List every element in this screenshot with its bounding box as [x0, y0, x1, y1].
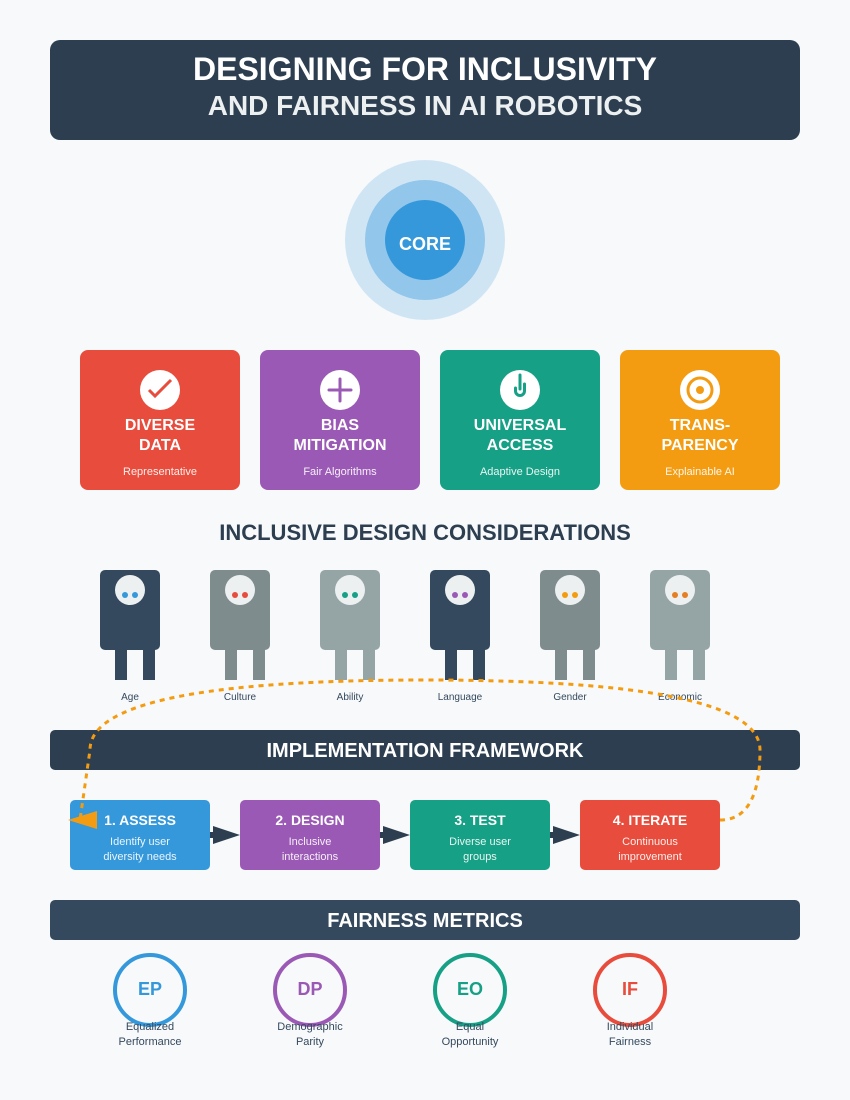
- icon: access hook: [500, 370, 540, 410]
- step: test: groups: [463, 851, 497, 863]
- panel: bias mitigation: MITIGATION: [293, 437, 387, 454]
- step: assess: diversity needs: [103, 851, 177, 863]
- panel: bias mitigation: BIAS: [321, 417, 359, 434]
- panel: transparency: TRANS-: [670, 417, 730, 434]
- figure: ability: Ability: [337, 692, 363, 703]
- figure: culture: Culture: [224, 692, 257, 703]
- figure: age: [100, 570, 160, 703]
- arrow: assess to design: [210, 826, 240, 844]
- step: assess: [70, 800, 210, 870]
- title banner: DESIGNING FOR INCLUSIVITY: [193, 51, 657, 87]
- heading bar: fairness metrics: FAIRNESS METRICS: [327, 910, 523, 932]
- arrow: design to test: [380, 826, 410, 844]
- figure: ability: [320, 570, 380, 703]
- metric: individual fairness: IF: [622, 979, 638, 999]
- heading bar: implementation framework: [50, 730, 800, 770]
- metric: equalized performance: Performance: [119, 1036, 181, 1048]
- metric: demographic parity: Demographic: [277, 1021, 343, 1033]
- step: design: 2. DESIGN: [275, 812, 345, 828]
- figure: language: Language: [438, 692, 483, 703]
- step: iterate: 4. ITERATE: [613, 812, 687, 828]
- figure: culture: [210, 570, 270, 703]
- heading bar: implementation framework: IMPLEMENTATION FRAMEWORK: [266, 740, 584, 762]
- metric: individual fairness: [595, 955, 665, 1048]
- panel: universal access: [440, 350, 600, 490]
- title banner: AND FAIRNESS IN AI ROBOTICS: [208, 90, 642, 121]
- figure: economic: [650, 570, 710, 703]
- metric: equal opportunity: [435, 955, 505, 1048]
- panel: transparency: Explainable AI: [665, 466, 735, 478]
- metric: equal opportunity: Equal: [456, 1021, 484, 1033]
- metric: demographic parity: Parity: [296, 1036, 325, 1048]
- step: design: [240, 800, 380, 870]
- panel: diverse data: DIVERSE: [125, 417, 195, 434]
- arrow: feedback loop from iterate to assess: [68, 680, 760, 829]
- panel: universal access: Adaptive Design: [480, 466, 560, 478]
- metric: equalized performance: Equalized: [126, 1021, 174, 1033]
- title banner: [50, 40, 800, 140]
- figure: language: [430, 570, 490, 703]
- metric: equal opportunity: Opportunity: [442, 1036, 499, 1048]
- panel: transparency: PARENCY: [661, 437, 739, 454]
- metric: individual fairness: Individual: [607, 1021, 653, 1033]
- icon: target: [680, 370, 720, 410]
- metric: equalized performance: [115, 955, 185, 1048]
- metric: demographic parity: DP: [297, 979, 323, 999]
- panel: bias mitigation: [260, 350, 420, 490]
- core concentric circles: CORE: [399, 234, 451, 254]
- step: test: Diverse user: [449, 836, 511, 848]
- panel: diverse data: Representative: [123, 466, 197, 478]
- metric: equalized performance: EP: [138, 979, 162, 999]
- figure: gender: Gender: [553, 692, 587, 703]
- heading bar: fairness metrics: [50, 900, 800, 940]
- step: test: 3. TEST: [454, 812, 506, 828]
- arrow: test to iterate: [550, 826, 580, 844]
- panel: diverse data: [80, 350, 240, 490]
- core concentric circles: [345, 160, 505, 320]
- heading: inclusive design considerations: INCLUSIVE DESIGN CONSIDERATIONS: [219, 520, 631, 545]
- step: design: interactions: [282, 851, 339, 863]
- step: iterate: improvement: [618, 851, 682, 863]
- metric: equal opportunity: EO: [457, 979, 483, 999]
- icon: plus: [320, 370, 360, 410]
- figure: gender: [540, 570, 600, 703]
- icon: check mark: [140, 370, 180, 410]
- panel: transparency: [620, 350, 780, 490]
- figure: age: Age: [121, 692, 139, 703]
- step: assess: Identify user: [110, 836, 170, 848]
- metric: demographic parity: [275, 955, 345, 1048]
- panel: bias mitigation: Fair Algorithms: [303, 466, 377, 478]
- panel: universal access: ACCESS: [487, 437, 554, 454]
- panel: diverse data: DATA: [139, 437, 181, 454]
- panel: universal access: UNIVERSAL: [474, 417, 566, 434]
- step: test: [410, 800, 550, 870]
- step: iterate: [580, 800, 720, 870]
- metric: individual fairness: Fairness: [609, 1036, 652, 1048]
- step: assess: 1. ASSESS: [104, 812, 176, 828]
- step: iterate: Continuous: [622, 836, 678, 848]
- figure: economic: Economic: [658, 692, 702, 703]
- step: design: Inclusive: [289, 836, 331, 848]
